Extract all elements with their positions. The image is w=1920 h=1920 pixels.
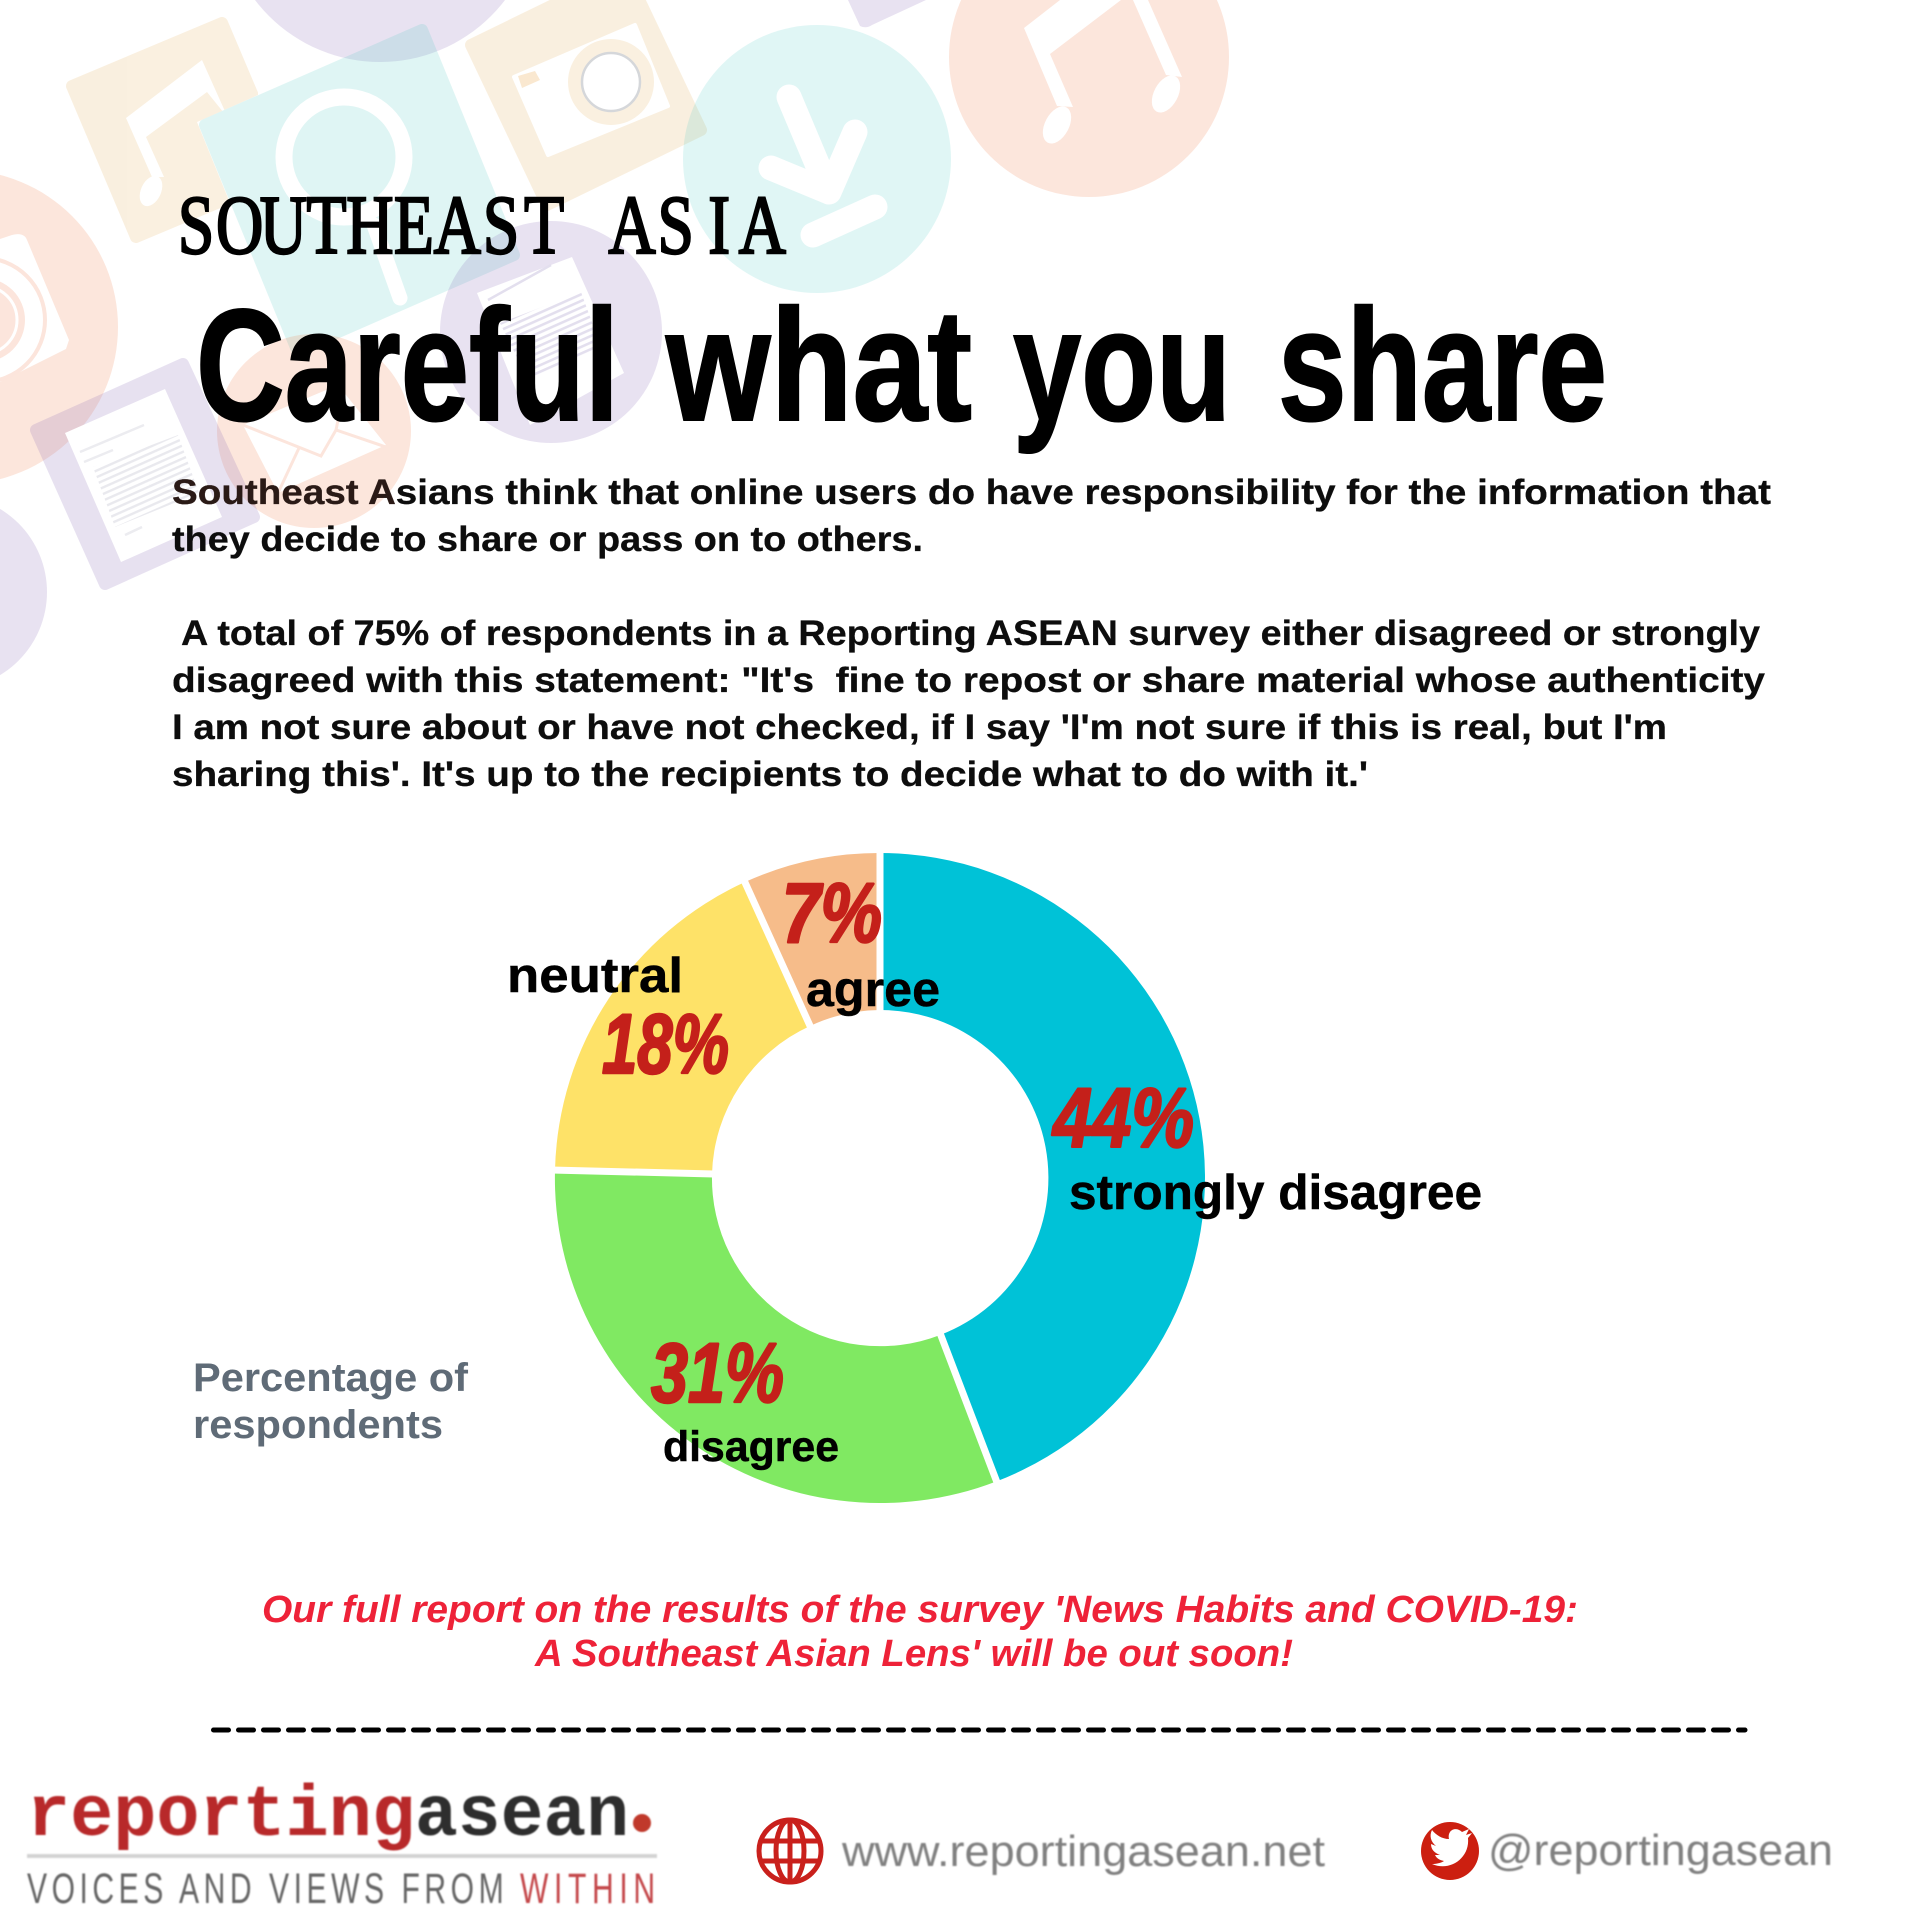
intro text block: sharing this'. It's up to the recipients to decide what to do with it.' [172, 755, 1368, 794]
logo: reportingasean: VOICES AND VIEWS FROM [27, 1864, 504, 1912]
logo: reportingasean [27, 1775, 657, 1912]
intro text block [172, 473, 1771, 794]
icon: tan camera square [471, 0, 701, 205]
chart note: percentage of respondents [193, 1356, 469, 1447]
chart note: percentage of respondents: respondents [193, 1403, 443, 1447]
label: strongly disagree: strongly disagree [1069, 1166, 1482, 1220]
label: disagree: disagree [663, 1423, 839, 1471]
segment: strongly disagree 44% [880, 853, 1205, 1481]
segment: agree 7% [745, 853, 880, 1026]
chart note: percentage of respondents: Percentage of [193, 1356, 469, 1400]
intro text block: Southeast A sians think that online users do have responsibility for the information that [172, 473, 1771, 512]
segment: disagree 31% [555, 1170, 996, 1503]
label: neutral: neutral [507, 949, 683, 1003]
icon: peach envelope circle [217, 334, 411, 528]
intro text block: disagreed with this statement: "It's fine to repost or share material whose authenticity [172, 661, 1766, 700]
background social media icons [0, 0, 1229, 689]
logo: reportingasean: WITHIN [520, 1864, 655, 1912]
intro text block: they decide to share or pass on to others. [172, 520, 923, 559]
label: 44%: 44% [1051, 1071, 1194, 1165]
logo: reportingasean: reporting [27, 1775, 415, 1857]
title: share [1278, 276, 1607, 454]
label: agree: agree [806, 963, 940, 1017]
callout: full report coming soon [262, 1589, 1578, 1675]
icon: tan music square [72, 23, 286, 237]
icon: globe [759, 1820, 821, 1882]
intro text block: A total of 75% of respondents in a Reporting ASEAN survey either disagreed or strongly [181, 614, 1761, 653]
title: Careful [196, 276, 619, 454]
intro text block: I am not sure about or have not checked, if I say 'I'm not sure if this is real, but I'm [172, 708, 1667, 747]
label: 18%: 18% [602, 997, 729, 1091]
icon: purple document circle [440, 221, 662, 443]
icon: peach camera circle [0, 170, 118, 484]
title [196, 276, 1607, 454]
icon: purple document square [36, 364, 254, 584]
icon: peach music circle [949, 0, 1229, 197]
website url: www.reportingasean.net [841, 1827, 1325, 1876]
callout: full report coming soon: Our full report on the results of the survey 'News Habits and COVID-19: [262, 1589, 1578, 1631]
logo: reportingasean: asean [415, 1775, 629, 1857]
segment: neutral 18% [555, 882, 810, 1174]
kicker: Southeast Asia: SOUTHEAST ASIA [178, 179, 786, 272]
label: 7%: 7% [782, 866, 882, 960]
twitter handle: @reportingasean [1488, 1826, 1833, 1875]
icon: teal download circle [683, 25, 951, 293]
title: you [1013, 276, 1231, 454]
icon: teal magnifier square [205, 30, 514, 350]
callout: full report coming soon: A Southeast Asian Lens' will be out soon! [534, 1633, 1293, 1675]
icon: twitter [1421, 1822, 1479, 1880]
donut chart [551, 850, 1205, 1503]
title: what [665, 276, 972, 454]
label: 31%: 31% [651, 1326, 784, 1420]
